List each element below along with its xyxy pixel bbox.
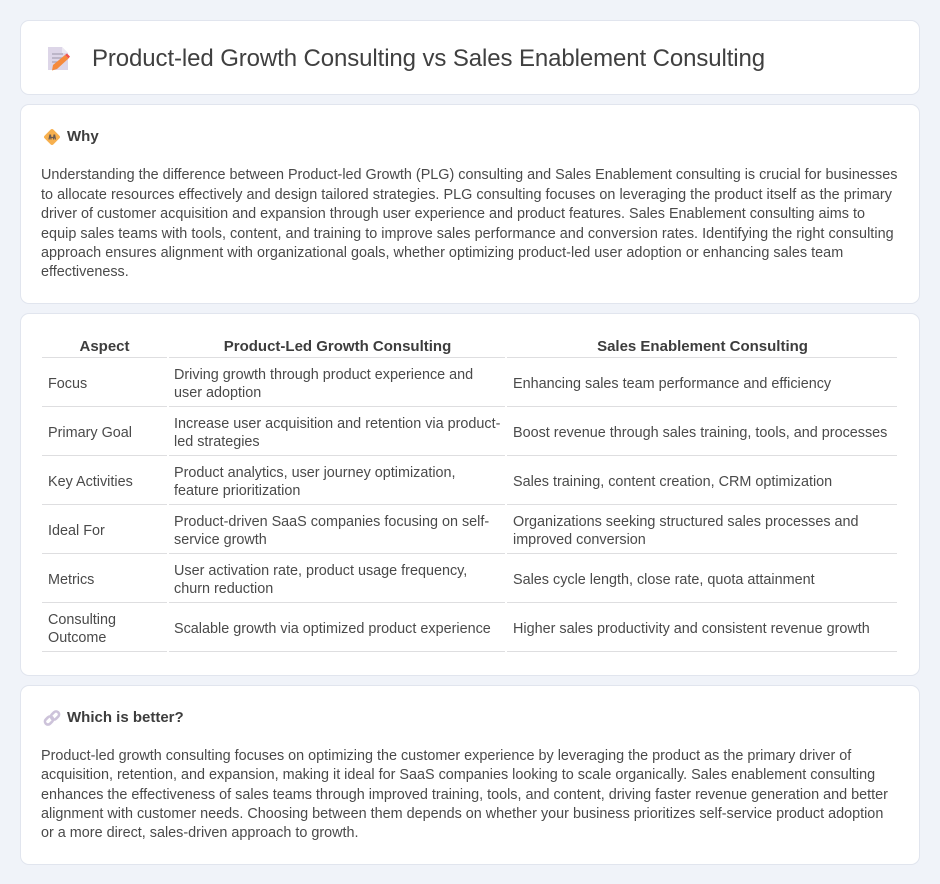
row: ideal for: Ideal For (48, 523, 105, 539)
icon: chain link (44, 710, 60, 726)
row: key activities: Sales training, content creation, CRM optimization (513, 474, 832, 490)
row: primary goal: Primary Goal (48, 425, 132, 441)
text block: why explanation: to allocate resources effectively and design tailored strategies. PLG consulting focuses on leveraging the product itself as the primary (41, 186, 892, 202)
text block: why explanation: Understanding the difference between Product-led Growth (PLG) consulting and Sales Enablement consulting is crucial for businesses (41, 167, 897, 183)
row: metrics (42, 563, 897, 603)
row: primary goal (42, 416, 897, 456)
icon: diamond sign (44, 129, 60, 145)
row: ideal for: improved conversion (513, 532, 646, 548)
icon: document with pencil (48, 47, 70, 70)
row: consulting outcome: Higher sales productivity and consistent revenue growth (513, 621, 870, 637)
row: focus: Driving growth through product experience and (174, 367, 473, 383)
row: key activities (42, 465, 897, 505)
row: focus: Enhancing sales team performance and efficiency (513, 376, 831, 392)
row: metrics: User activation rate, product usage frequency, (174, 563, 467, 579)
table header: Product-Led Growth Consulting (224, 338, 451, 355)
text block: why explanation: driver of customer acquisition and expansion through user experience and product features. Sales Enablement consulting aims to (41, 206, 865, 222)
row: metrics: Sales cycle length, close rate, quota attainment (513, 572, 815, 588)
row: key activities: feature prioritization (174, 483, 300, 499)
text block: which is better explanation: alignment with customer needs. Choosing between them depends on whether your business prioritizes self-service product adoption (41, 806, 883, 822)
panel: comparison table (20, 313, 920, 676)
panel: why (20, 104, 920, 304)
comparison table (42, 338, 897, 652)
row: consulting outcome: Outcome (48, 630, 106, 646)
heading: which is better: Which is better? (67, 709, 184, 726)
table header: Sales Enablement Consulting (597, 338, 808, 355)
row: primary goal: Boost revenue through sales training, tools, and processes (513, 425, 887, 441)
text block: which is better explanation: enhances the effectiveness of sales teams through improved training, tools, and content, driving faster revenue generation and better (41, 786, 888, 802)
text block: why explanation: equip sales teams with tools, content, and training to improve sales performance and conversion rates. Identifying the right consulting (41, 226, 894, 242)
row: focus (42, 367, 897, 407)
row: primary goal: led strategies (174, 434, 260, 450)
row: ideal for: service growth (174, 532, 267, 548)
panel: which is better (20, 685, 920, 865)
row: consulting outcome: Consulting (48, 612, 116, 628)
text block: which is better explanation: acquisition, retention, and expansion, making it ideal for SaaS companies looking to scale organically. Sales enablement consulting (41, 767, 875, 783)
text block: which is better explanation (41, 748, 888, 841)
title: Product-led Growth Consulting vs Sales Enablement Consulting (92, 45, 765, 72)
row: metrics: Metrics (48, 572, 94, 588)
text block: why explanation: effectiveness. (41, 264, 129, 280)
table header: Aspect (79, 338, 130, 355)
row: metrics: churn reduction (174, 581, 273, 597)
table header (42, 338, 897, 358)
row: primary goal: Increase user acquisition and retention via product- (174, 416, 500, 432)
text block: why explanation (41, 167, 897, 280)
text block: which is better explanation: or a more direct, sales-driven approach to growth. (41, 825, 359, 841)
row: ideal for (42, 514, 897, 554)
row: ideal for: Organizations seeking structured sales processes and (513, 514, 859, 530)
row: ideal for: Product-driven SaaS companies focusing on self- (174, 514, 489, 530)
row: focus: Focus (48, 376, 87, 392)
row: consulting outcome: Scalable growth via optimized product experience (174, 621, 491, 637)
row: consulting outcome (42, 612, 897, 652)
row: focus: user adoption (174, 385, 261, 401)
text block: which is better explanation: Product-led growth consulting focuses on optimizing the customer experience by leveraging the product as the primary driver of (41, 748, 851, 764)
row: key activities: Product analytics, user journey optimization, (174, 465, 456, 481)
row: key activities: Key Activities (48, 474, 133, 490)
heading: why: Why (67, 128, 99, 145)
panel: title card (20, 20, 920, 95)
text block: why explanation: approach ensures alignment with organizational goals, whether optimizing product-led user adoption or enhancing sales team (41, 245, 843, 261)
